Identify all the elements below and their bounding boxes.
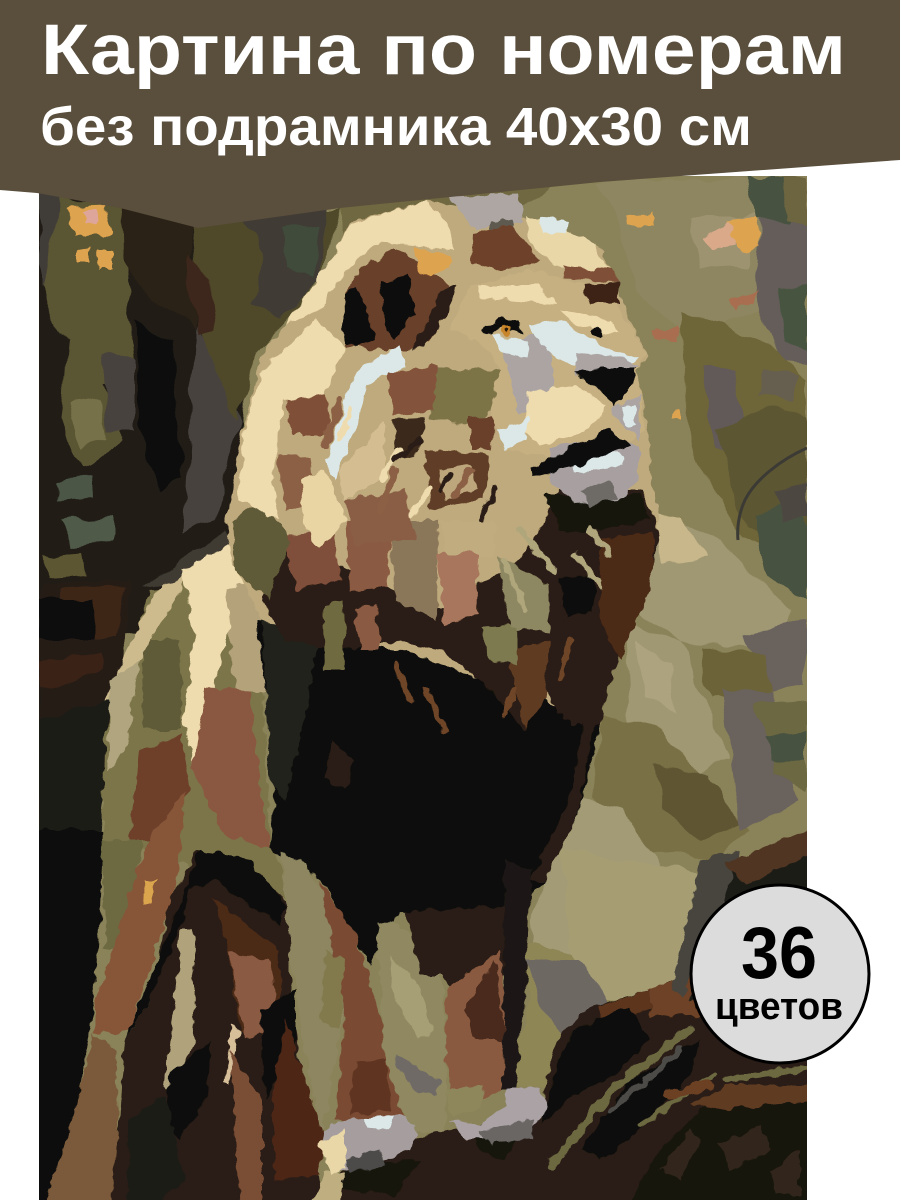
black lower left — [39, 827, 104, 1200]
rock foreground — [300, 825, 820, 1200]
painting background: right side — [79, 176, 807, 1184]
paws — [319, 1088, 548, 1175]
rock strata strokes — [552, 1030, 807, 1165]
front haunch — [102, 840, 140, 950]
autumn leaf highlights — [66, 206, 760, 418]
lower mane dark — [262, 490, 660, 730]
ear — [343, 248, 453, 350]
header banner — [0, 0, 900, 228]
badge number: 36 — [741, 913, 817, 994]
crack line on the rock — [738, 448, 807, 540]
grey muzzle shadow / left mane tones — [232, 500, 290, 600]
cream locks left — [238, 320, 345, 520]
mane brush strokes — [325, 400, 610, 730]
shoulder — [102, 580, 290, 900]
cheek — [428, 367, 501, 426]
lion mane — [226, 194, 660, 730]
badge caption: цветов — [715, 986, 843, 1028]
dark hind leg — [110, 850, 325, 1200]
title: Картина по номерам — [41, 11, 846, 90]
lion face — [478, 266, 642, 508]
painting: lion by numbers — [20, 160, 820, 1200]
between legs — [376, 921, 446, 1114]
lion body — [30, 540, 602, 1200]
chest shadow — [257, 620, 600, 965]
right foreleg — [404, 905, 506, 986]
subtitle: без подрамника 40х30 см — [40, 97, 752, 157]
badge: 36 colours — [691, 885, 869, 1063]
left foreleg — [280, 850, 345, 1130]
painting background: left forest — [39, 193, 340, 832]
